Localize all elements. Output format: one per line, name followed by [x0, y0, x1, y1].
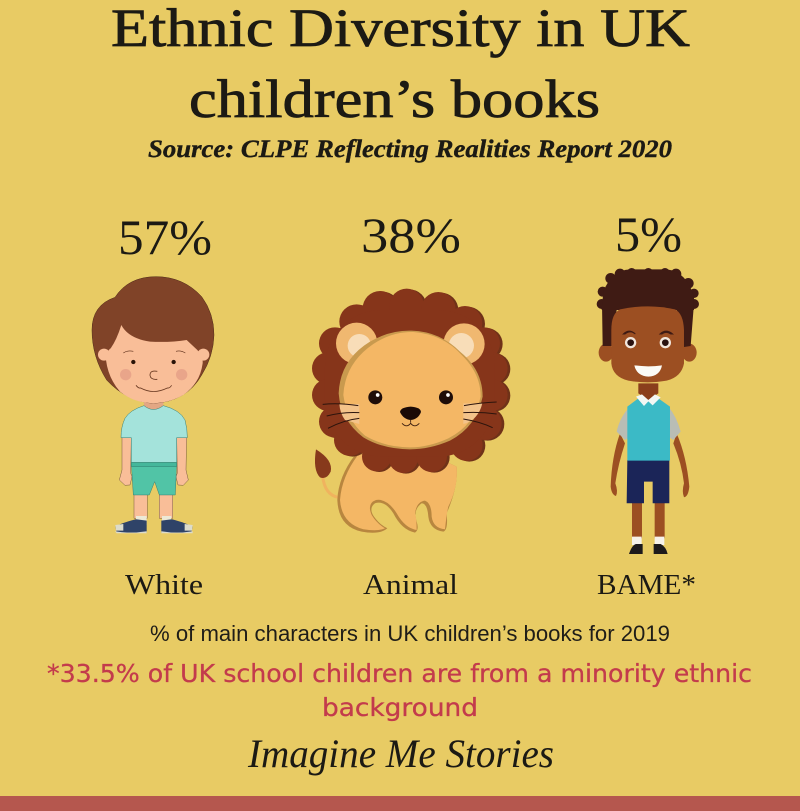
callout: school children statistic: *33.5% of UK school children are from a minority ethnic	[47, 659, 752, 688]
percentage: BAME: 5%	[615, 206, 682, 262]
percentage: white: 57%	[118, 209, 212, 265]
label: Animal: Animal	[363, 570, 458, 601]
source line: Source: CLPE Reflecting Realities Report 2020	[148, 136, 673, 163]
icon: white boy	[92, 277, 214, 533]
icon: BAME boy	[597, 268, 699, 554]
callout: school children statistic: background	[322, 693, 478, 722]
mane	[312, 289, 510, 474]
label: White: White	[125, 570, 203, 601]
footer bar	[0, 796, 800, 811]
icon: lion	[312, 289, 510, 533]
title	[111, 0, 690, 129]
callout: school children statistic	[47, 659, 752, 722]
chart caption: % of main characters in UK children’s books for 2019	[150, 621, 670, 646]
hair	[597, 268, 699, 347]
percentage: animal: 38%	[361, 207, 461, 263]
title: children’s books	[189, 69, 600, 129]
brand signature: Imagine Me Stories	[247, 731, 554, 776]
label: BAME: BAME*	[597, 570, 696, 601]
